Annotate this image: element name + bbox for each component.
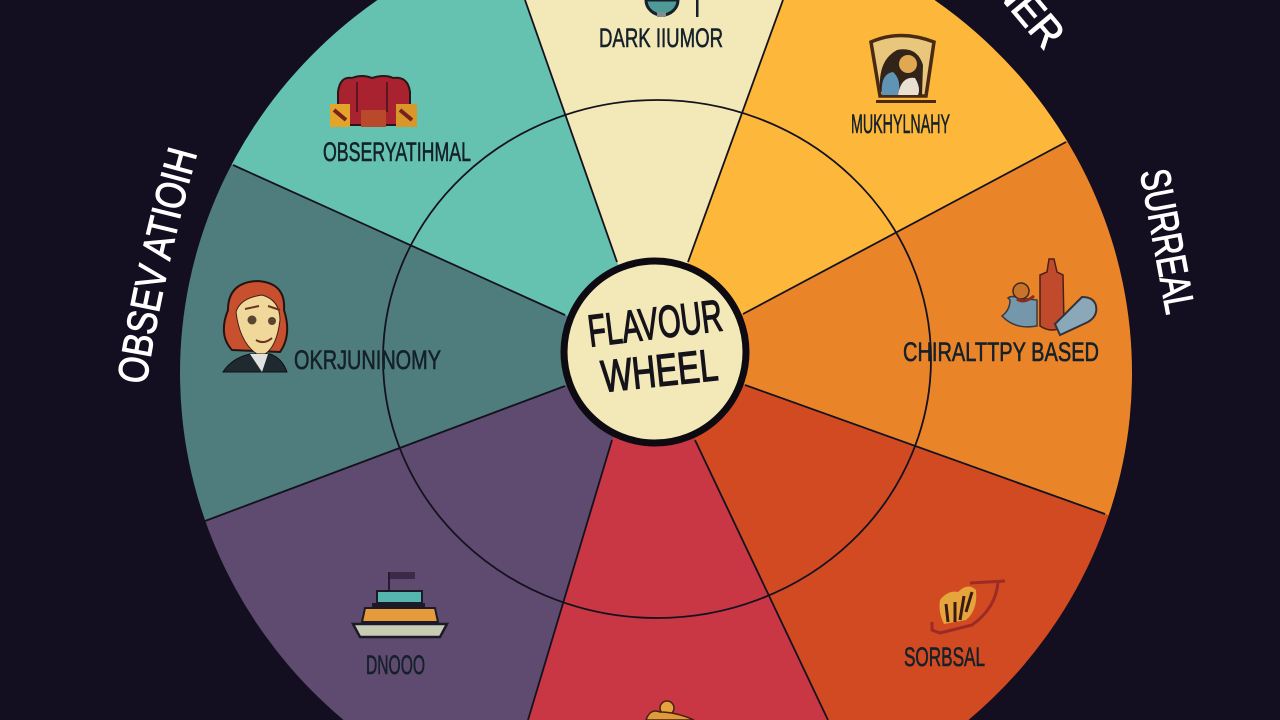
segment: yellow <box>688 0 1067 314</box>
icon: portrait shield <box>871 36 936 103</box>
segment: character based <box>742 141 1132 516</box>
icon: bottom figure <box>646 701 694 720</box>
segment: red <box>529 437 827 720</box>
label: observational: OBSERYATIHMAL <box>323 137 471 167</box>
label: dark humor: DARK IIUMOR <box>599 23 723 53</box>
segment dividers <box>205 0 1105 720</box>
hub title <box>585 290 725 402</box>
icon: red-haired face <box>223 281 287 372</box>
inner ring <box>383 100 931 618</box>
segment: surreal <box>694 384 1108 720</box>
hub title: WHEEL <box>599 339 720 402</box>
segment: dark humor <box>526 0 782 265</box>
icon: theatre curtains <box>330 76 417 127</box>
flavour wheel <box>180 0 1132 720</box>
segment: purple <box>205 386 614 720</box>
label: surreal segment: SORBSAL <box>904 642 985 672</box>
icon: bottles <box>1002 259 1096 335</box>
wheel segments <box>180 0 1132 720</box>
segment: dark teal <box>180 164 568 521</box>
icon: dark humor <box>646 0 698 17</box>
label: character based: CHIRALTTPY BASED <box>903 337 1099 367</box>
hub title: FLAVOUR <box>585 290 725 357</box>
label: dark teal segment: OKRJUNINOMY <box>294 345 441 375</box>
segment: observational <box>232 0 618 316</box>
outer label: observation: OBSEV ATIOIH <box>118 147 197 382</box>
icon: boat <box>353 572 447 637</box>
label: yellow segment: MUKHYLNAHY <box>851 109 950 139</box>
outer label: surreal: SURREAL <box>1131 165 1204 317</box>
center hub <box>564 261 746 443</box>
icon: surreal <box>932 581 1005 633</box>
hub disc <box>564 261 746 443</box>
label: purple segment: DNOOO <box>366 650 425 680</box>
